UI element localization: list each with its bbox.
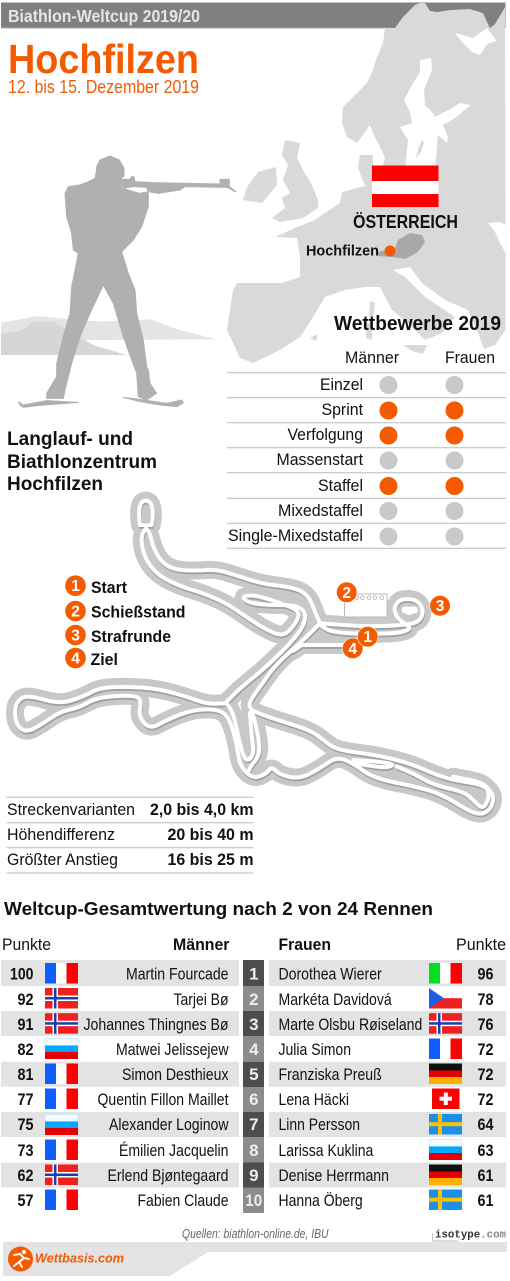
women row 2: Markéta Davidová [278,991,392,1009]
row: Single-Mixedstaffel [228,527,464,546]
men row 1: Martin Fourcade [126,966,228,984]
row: Sprint [322,401,464,420]
row: Sprint: Sprint [322,401,363,419]
women row 9: Denise Herrmann [278,1167,389,1185]
women row 6 [278,1088,494,1109]
ranking column headers: Punkte [2,936,51,954]
women row 3: Marte Olsbu Røiseland [278,1016,422,1034]
rank column [243,960,264,1213]
men row 5: Simon Desthieux [122,1066,229,1084]
men row 2 [18,988,228,1009]
skis [18,401,78,407]
row: Einzel [320,376,464,394]
rank column: 2 [249,990,259,1009]
women row 5: Franziska Preuß [278,1066,382,1084]
venue heading: Langlauf- und [7,429,133,450]
Great Britain [272,140,318,222]
landscape hills [1,316,217,355]
women row 10 [278,1190,494,1210]
marker 4: 4 [348,641,357,658]
track legend [65,575,186,669]
row: Verfolgung [288,426,464,444]
venue heading: Biathlonzentrum [7,452,157,473]
ranking column headers: Punkte [456,936,506,954]
women row 7: 64 [478,1115,494,1134]
panel: competitions table [227,313,506,548]
marker 1: 1 [363,629,372,646]
men row 8: 73 [18,1141,34,1160]
course statistics: Größter Anstieg [7,851,118,869]
rank column: 1 [249,964,259,984]
men row 5 [18,1064,229,1084]
venue heading [7,429,157,495]
women row 9 [278,1164,494,1185]
Austrian flag [372,166,438,207]
women row 9: 61 [478,1166,494,1185]
marker 4 [342,638,363,659]
women row 5: 72 [478,1065,494,1084]
location dot [384,246,396,256]
course statistics: Höhendifferenz [7,826,115,844]
women row 2: 78 [478,990,494,1009]
men row 1: 100 [10,964,34,984]
men row 6: Quentin Fillon Maillet [98,1091,229,1109]
shooting range [344,594,387,617]
women row 5 [278,1064,494,1084]
men row 6: 77 [18,1090,34,1109]
legend: Strafrunde: 3 [71,627,80,644]
ranking: men [10,963,229,1210]
women row 4 [278,1038,494,1059]
legend: Ziel: Ziel [90,650,118,669]
row: Staffel [318,477,464,495]
women row 7 [278,1114,494,1134]
legend: Schießstand: 2 [71,603,80,620]
women row 10: 61 [478,1191,494,1210]
header text: Biathlon-Weltcup 2019/20 [8,6,200,26]
row: Mixedstaffel: Mixedstaffel [278,502,363,520]
track map [15,501,494,816]
column headers: Frauen [445,349,495,367]
women row 1: Dorothea Wierer [278,966,382,984]
ranking column headers: Männer [173,936,230,954]
marker 2 [336,582,357,603]
women row 3: 76 [478,1015,494,1034]
men row 10: 57 [18,1191,34,1210]
rank column: 4 [249,1040,259,1059]
rank column: 10 [245,1191,262,1210]
course statistics: 16 bis 25 m [168,850,254,869]
men row 7 [18,1114,229,1135]
row: Verfolgung: Verfolgung [288,426,363,444]
men row 9: 62 [18,1166,34,1185]
men row 3 [18,1013,228,1034]
place label: Hochfilzen [306,242,379,260]
rank column: 8 [249,1141,259,1160]
biathlete silhouette [18,156,236,407]
women row 8 [278,1140,494,1160]
row: Einzel: Einzel [320,376,363,394]
rifle [121,177,236,193]
men row 8 [18,1140,228,1160]
men row 10 [18,1190,228,1210]
row: Massenstart [276,451,464,470]
legend: Start [65,575,127,597]
women row 4: 72 [478,1040,494,1059]
rank column: 9 [249,1166,259,1185]
course statistics: Streckenvarianten [7,801,135,819]
men row 2: 92 [18,990,34,1009]
women row 1 [278,963,494,984]
men row 3: Johannes Thingnes Bø [84,1016,228,1034]
rank column: 7 [249,1115,259,1134]
men row 7: 75 [18,1115,34,1134]
ranking: women [278,963,494,1210]
marker 1 [357,626,378,647]
women row 1: 96 [478,964,494,984]
column headers: Männer [345,349,399,367]
legend: Ziel [65,648,118,669]
men row 4 [18,1038,229,1059]
legend: Ziel: 4 [71,650,80,667]
marker 3: 3 [436,598,445,615]
legend: Start: Start [91,578,127,597]
women row 6: 72 [478,1090,494,1109]
table heading: Wettbewerbe 2019 [334,313,501,335]
men row 9 [18,1164,228,1185]
legend: Start: 1 [71,578,80,595]
men row 7: Alexander Loginow [109,1116,229,1134]
course statistics: 2,0 bis 4,0 km [150,800,254,819]
women row 3 [278,1013,494,1034]
map of Europe [227,2,506,363]
row: Massenstart: Massenstart [276,451,363,469]
men row 9: Erlend Bjøntegaard [108,1167,228,1185]
men row 8: Émilien Jacquelin [119,1141,228,1160]
men row 2: Tarjei Bø [174,991,228,1009]
venue heading: Hochfilzen [7,474,103,495]
logo icon [8,1246,33,1272]
source note: Quellen: biathlon-online.de, IBU [182,1227,329,1241]
isotype credit: isotype.com [435,1230,506,1242]
rank column: 3 [249,1015,259,1034]
date: 12. bis 15. Dezember 2019 [8,77,199,97]
ranking column headers [2,936,506,954]
women row 8: Larissa Kuklina [278,1142,374,1160]
logo [8,1246,124,1272]
header bar [1,2,506,28]
ranking heading: Weltcup-Gesamtwertung nach 2 von 24 Rennen [4,898,433,919]
men row 1 [10,963,228,984]
Ireland [243,167,277,203]
row: Single-Mixedstaffel: Single-Mixedstaffel [228,527,363,545]
legend: Schießstand [65,601,186,622]
men row 4: 82 [18,1040,34,1059]
legend: Strafrunde [65,625,171,646]
country label: ÖSTERREICH [353,212,458,232]
legend: Schießstand: Schießstand [91,603,186,622]
row: Staffel: Staffel [318,477,363,495]
column headers [345,349,495,367]
women row 6: Lena Häcki [278,1091,349,1109]
row: Mixedstaffel [278,502,464,520]
women row 2 [278,988,494,1009]
Mediterranean islands [310,301,427,354]
men row 5: 81 [18,1065,34,1084]
logo text: Wettbasis.com [35,1252,124,1266]
course statistics: 20 bis 40 m [168,825,254,844]
men row 6 [18,1088,229,1109]
legend: Strafrunde: Strafrunde [91,627,171,646]
footer band [3,1242,507,1276]
women row 4: Julia Simon [278,1041,351,1059]
women row 8: 63 [478,1141,494,1160]
rank column: 5 [249,1065,259,1084]
men row 3: 91 [18,1015,34,1034]
ranking column headers: Frauen [278,936,331,954]
women row 10: Hanna Öberg [278,1192,363,1210]
title: Hochfilzen [8,36,199,82]
men row 10: Fabien Claude [138,1192,228,1210]
men row 4: Matwei Jelissejew [116,1041,229,1059]
Austria [378,233,425,259]
marker 3 [430,595,450,616]
ranking table bands [1,960,506,1188]
women row 7: Linn Persson [278,1116,360,1134]
course statistics [6,797,254,873]
marker 2: 2 [342,585,351,602]
rank column: 6 [249,1090,259,1109]
